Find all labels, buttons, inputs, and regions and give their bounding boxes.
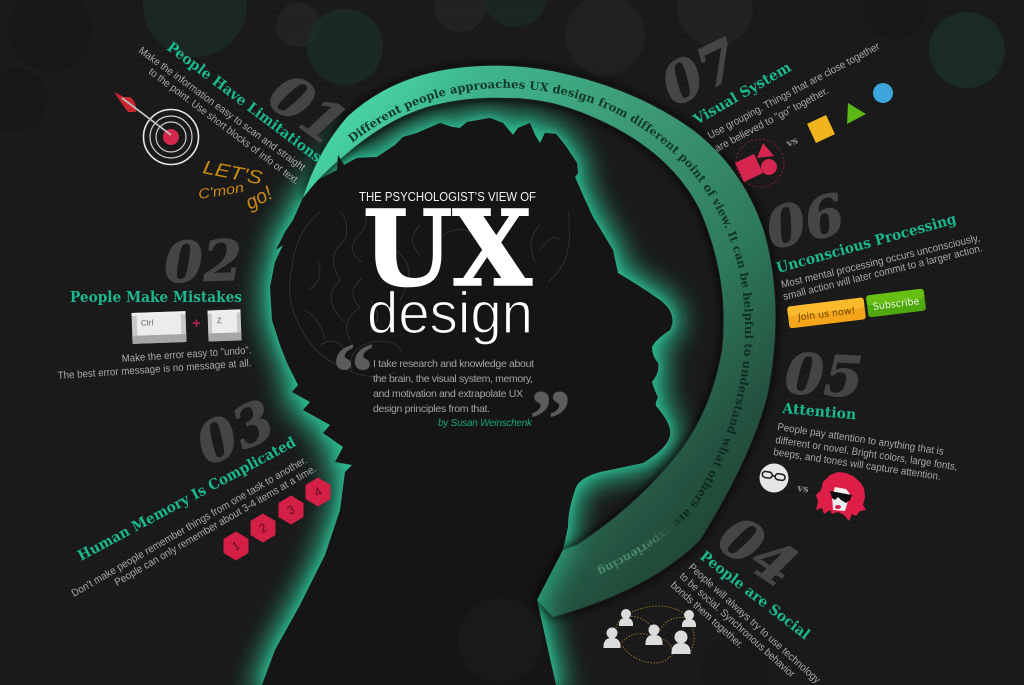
hair overlapping ribbon <box>296 118 591 212</box>
panel 05: attention <box>760 341 958 521</box>
quote text <box>373 358 534 415</box>
quote block <box>332 326 572 467</box>
body text: small action will later commit to a larger action. <box>782 242 984 303</box>
number 01: 01 <box>256 60 358 159</box>
ribbon <box>297 62 780 623</box>
icon: ctrl key: Ctrl <box>141 318 154 328</box>
heading: Unconscious Processing <box>775 210 958 277</box>
number 06: 06 <box>760 181 851 263</box>
heading: People are Social <box>697 548 813 643</box>
icon: red-haired face with sunglasses <box>816 472 866 521</box>
title block <box>359 187 536 346</box>
body text <box>773 421 958 483</box>
head silhouette <box>262 118 672 685</box>
handwriting: let's c'mon go: go! <box>242 182 277 214</box>
body text: Use grouping. Things that are close together <box>706 40 882 142</box>
heading: Human Memory Is Complicated <box>75 434 299 565</box>
body text <box>57 344 252 382</box>
handwriting: let's c'mon go: LET'S <box>201 157 264 189</box>
number 03: 03 <box>186 387 284 479</box>
heading: People Make Mistakes <box>70 289 242 306</box>
icon: numbered hexagons: 3 <box>285 502 298 518</box>
attribution: by Susan Weinschenk <box>438 418 533 429</box>
body text: Make the error easy to "undo". <box>121 344 252 365</box>
quote text: and motivation and extrapolate UX <box>373 388 523 400</box>
body text: to the point. Use short blocks of info or text. <box>146 66 302 187</box>
panel 04: people are social <box>603 503 823 685</box>
heading: Visual System <box>690 58 795 129</box>
body text: Don't make people remember things from one task to another. <box>70 454 309 600</box>
body text: Make the information easy to scan and straight <box>136 45 308 174</box>
quote text: I take research and knowledge about <box>373 358 534 370</box>
button: subscribe <box>866 289 926 317</box>
icon: separated shapes <box>807 83 893 143</box>
title: design: design <box>367 281 533 346</box>
body text: different or novel. Bright colors, large fonts, <box>775 434 958 473</box>
brain outline <box>290 153 569 377</box>
icon: z key: Z <box>217 316 222 325</box>
icon: ctrl key <box>131 311 187 344</box>
body text: The best error message is no message at all. <box>57 357 252 382</box>
body text: People can only remember about 3-4 items at a time. <box>112 463 319 589</box>
handwriting: let's c'mon go <box>197 157 277 214</box>
panel 06: unconscious processing <box>760 181 984 329</box>
opening quote mark: “ <box>332 326 374 420</box>
heading: People Have Limitations <box>164 39 325 166</box>
title: kicker: THE PSYCHOLOGIST’S VIEW OF <box>359 190 536 204</box>
icon: z key <box>207 309 242 342</box>
icon: plus sign: + <box>192 315 201 332</box>
icon: numbered hexagons <box>224 478 330 560</box>
quote text: design principles from that. <box>373 403 490 415</box>
icon: plain face with glasses <box>760 464 788 492</box>
icon: target with arrow <box>114 92 198 164</box>
closing quote mark: ” <box>529 373 572 467</box>
button: join us now: Join us now! <box>796 305 856 324</box>
number 05: 05 <box>783 341 865 411</box>
number 07: 07 <box>651 26 750 120</box>
faint circle on shoulder <box>458 598 542 682</box>
icon: numbered hexagons: 2 <box>257 520 270 536</box>
quote text: the brain, the visual system, memory, <box>373 373 533 385</box>
panel 07: visual system <box>651 26 893 187</box>
number 04: 04 <box>707 503 808 601</box>
head glow <box>262 118 672 685</box>
panel 02: people make mistakes <box>57 228 252 382</box>
panel 01: people have limitations <box>114 39 358 214</box>
number 02: 02 <box>163 228 243 296</box>
body text: beeps, and tones will capture attention. <box>773 446 941 483</box>
body text: People pay attention to anything that is <box>777 421 944 458</box>
body text: bonds them together. <box>668 579 746 651</box>
vs label: vs <box>784 135 800 150</box>
body text: are believed to "go" together. <box>713 85 831 155</box>
handwriting: let's c'mon go: C'mon <box>197 179 245 202</box>
icon: numbered hexagons: 4 <box>312 484 325 500</box>
vs label: vs <box>796 483 810 496</box>
panel 03: human memory is complicated <box>70 387 330 600</box>
icon: numbered hexagons: 1 <box>230 538 243 554</box>
button: join us now <box>787 297 866 329</box>
icon: grouped shapes <box>735 139 784 187</box>
heading: Attention <box>781 400 857 423</box>
ribbon text: Different people approaches UX design from different point of view. It can be helpful to understand what others are experiencing <box>348 79 754 574</box>
body text: Most mental processing occurs unconsciously, <box>780 232 981 291</box>
icon: social network <box>603 606 696 663</box>
button: subscribe: Subscribe <box>872 296 920 313</box>
title: UX: UX <box>363 187 532 310</box>
